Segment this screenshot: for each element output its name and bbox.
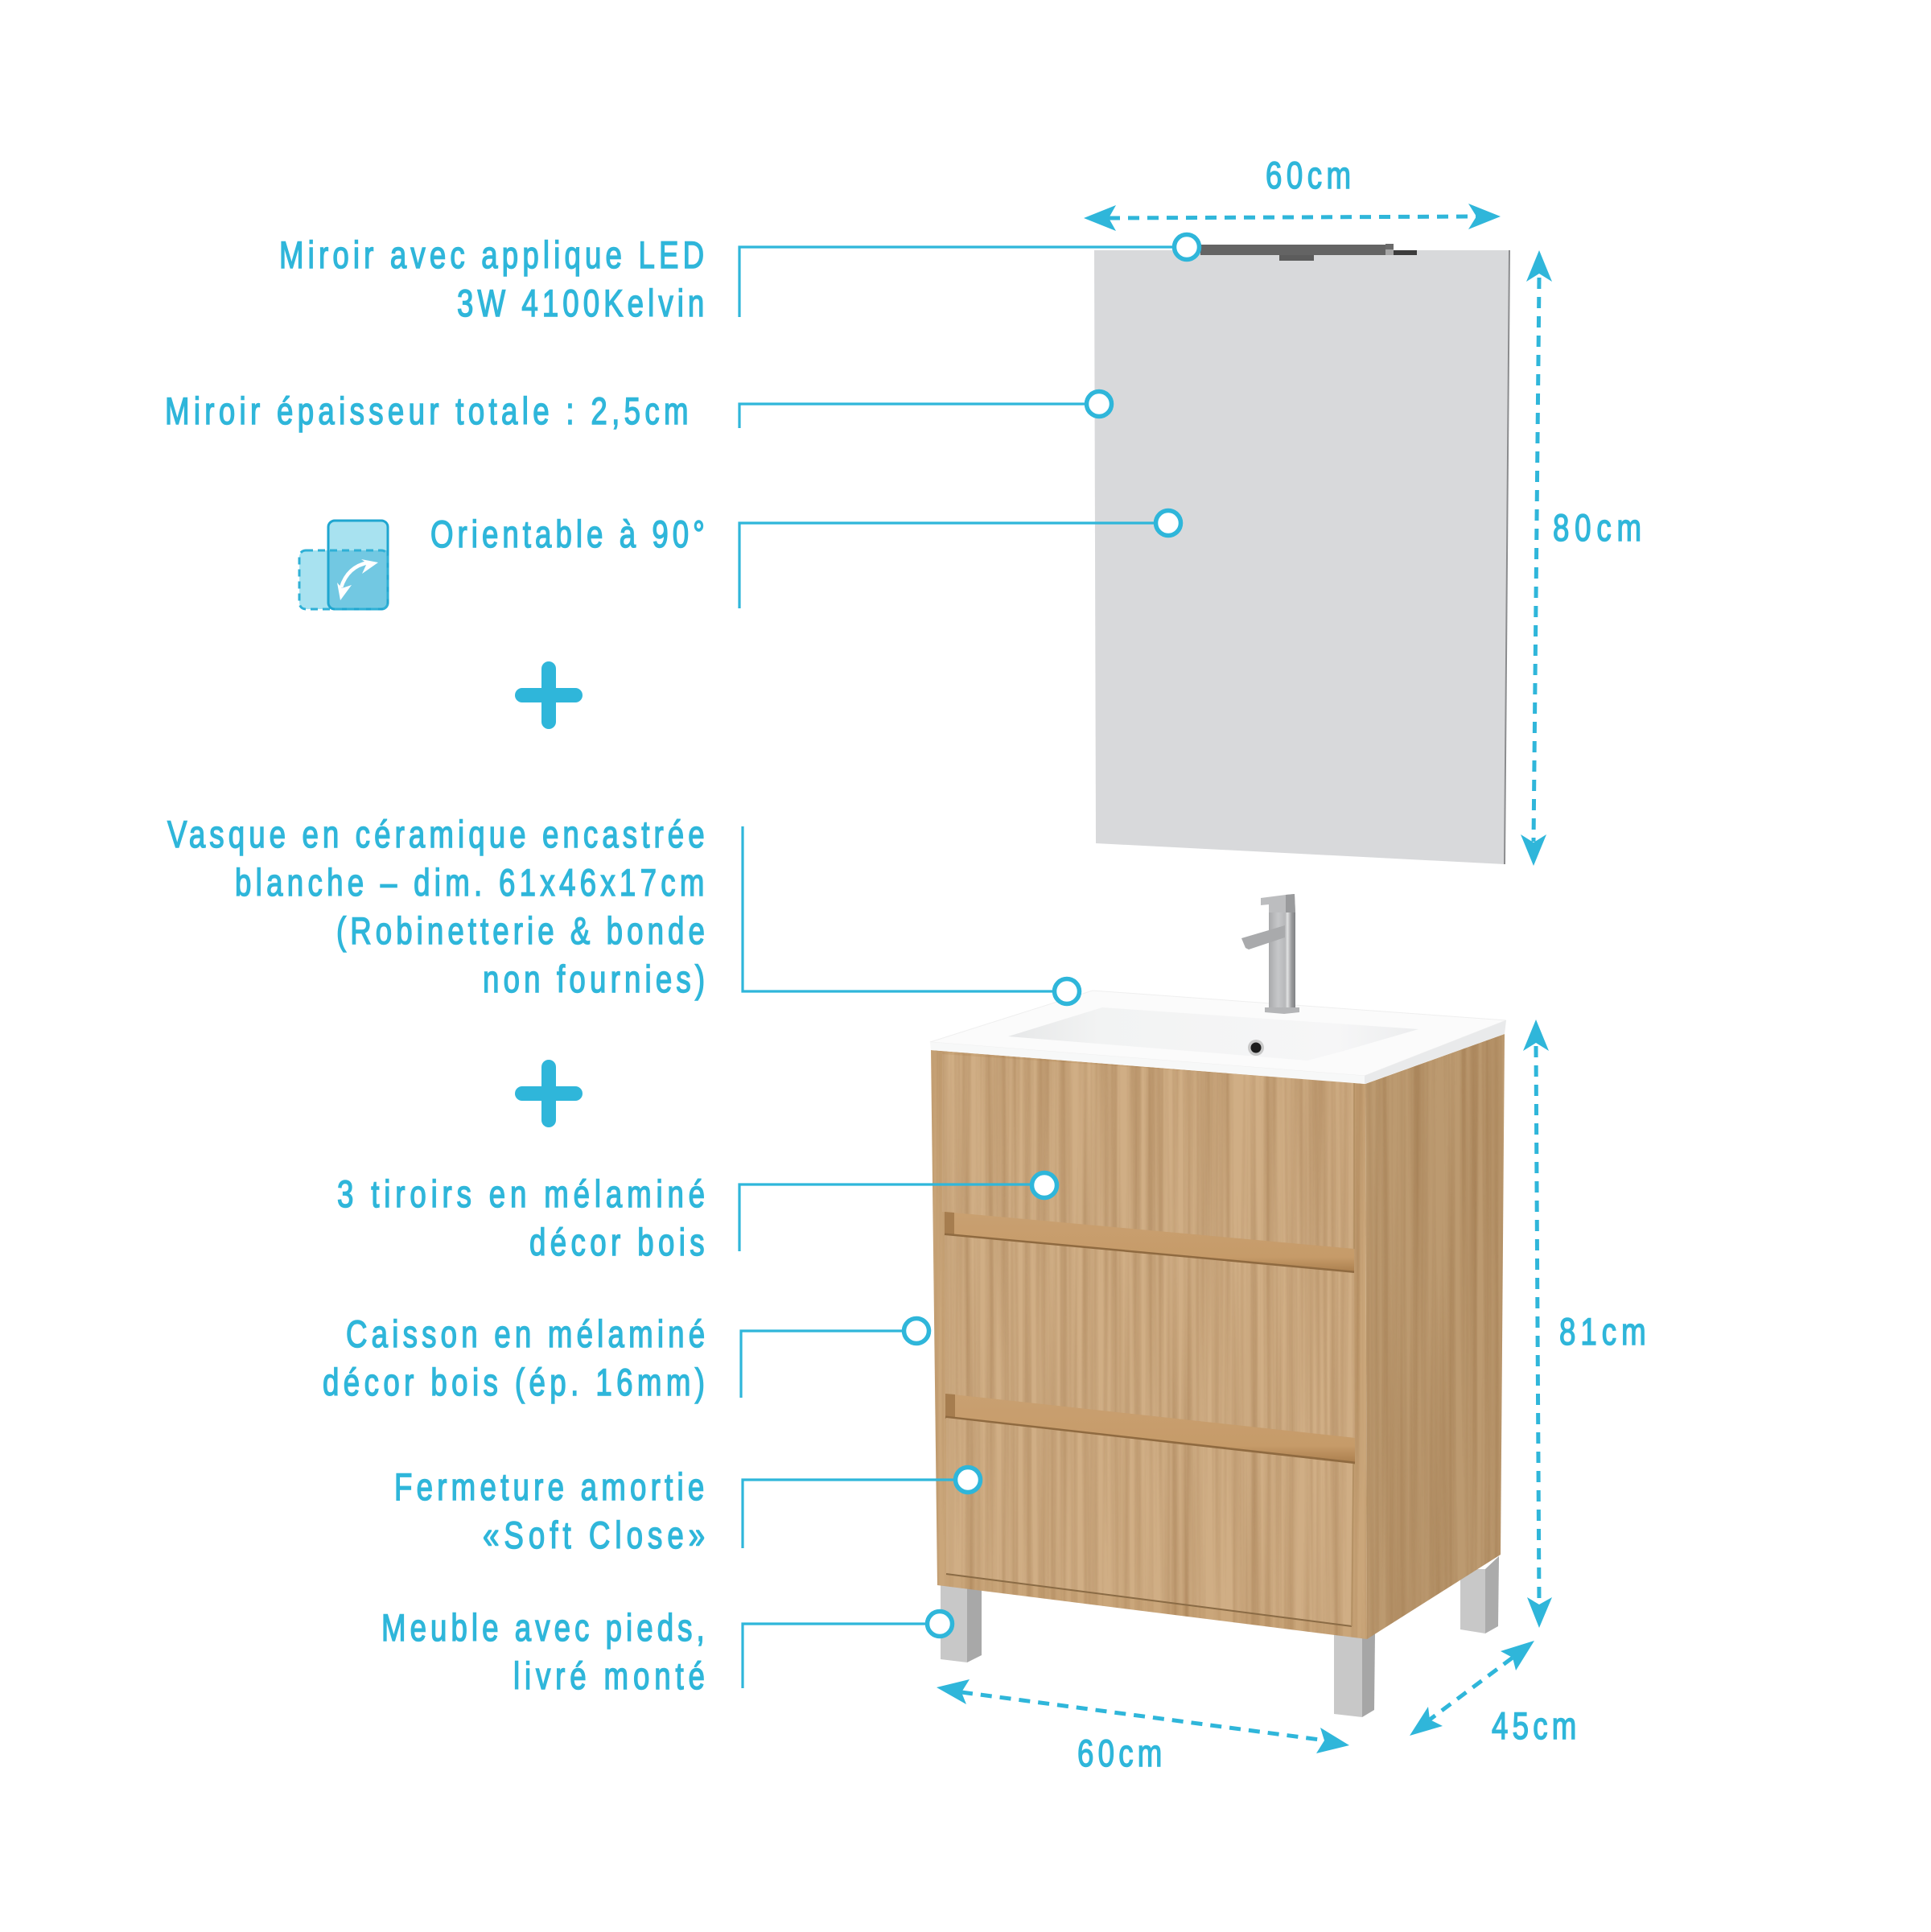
top drawer	[942, 1054, 1354, 1249]
text: basin: Vasque en céramique encastrée	[167, 814, 705, 855]
dimension: cabinet width	[937, 1679, 1349, 1774]
text: basin: non fournies)	[483, 958, 705, 1000]
cabinet frame	[931, 1050, 1367, 1639]
text: basin	[167, 814, 705, 1000]
bottom drawer	[946, 1418, 1353, 1626]
left leg	[941, 1581, 982, 1662]
basin bowl	[1008, 1007, 1418, 1061]
marker: case	[904, 1318, 928, 1344]
marker: feet	[927, 1611, 953, 1637]
middle drawer	[945, 1235, 1355, 1438]
text: mirror thickness: Miroir épaisseur totale : 2,5cm	[165, 390, 689, 432]
top handle recess	[945, 1212, 1354, 1272]
text: drawers: 3 tiroirs en mélaminé	[337, 1173, 705, 1215]
leader: orientable	[739, 523, 1167, 608]
leader: basin	[743, 826, 1067, 991]
marker: LED mirror	[1175, 235, 1199, 259]
vanity unit	[930, 894, 1506, 1717]
marker: soft close	[956, 1468, 980, 1492]
text: LED mirror	[279, 234, 704, 324]
text: LED mirror: Miroir avec applique LED	[279, 234, 704, 276]
mirror panel	[1094, 250, 1509, 864]
plus sign 2	[515, 1060, 583, 1127]
cabinet side	[1365, 1034, 1505, 1639]
marker: basin	[1054, 978, 1080, 1004]
ceramic basin	[930, 991, 1506, 1084]
text: basin: (Robinetterie & bonde	[336, 910, 705, 952]
drain	[1248, 1040, 1264, 1056]
tap	[1241, 894, 1299, 1014]
leader: drawers	[739, 1184, 1044, 1251]
text: drawers: décor bois	[529, 1221, 705, 1263]
text: feet: livré monté	[513, 1655, 705, 1697]
back right leg	[1460, 1556, 1499, 1633]
marker: drawers	[1031, 1173, 1057, 1197]
text: case	[323, 1313, 705, 1403]
leader: feet	[743, 1624, 940, 1688]
label: 81cm: 81cm	[1559, 1311, 1646, 1353]
text: soft close	[394, 1466, 705, 1556]
text: case: Caisson en mélaminé	[346, 1313, 705, 1355]
leader: LED mirror	[739, 247, 1187, 317]
icon: rotation 90 degrees	[299, 521, 388, 609]
dimension: mirror height	[1521, 250, 1641, 866]
mirror right edge	[1505, 250, 1509, 864]
dimension: cabinet height	[1523, 1020, 1646, 1628]
text: LED mirror: 3W 4100Kelvin	[457, 282, 704, 324]
label: 60cm: 60cm	[1266, 154, 1351, 196]
LED light bar	[1200, 244, 1417, 261]
marker: orientable	[1155, 510, 1181, 536]
label: 80cm: 80cm	[1553, 507, 1641, 549]
text: soft close: «Soft Close»	[483, 1514, 705, 1556]
leader: case	[741, 1331, 916, 1398]
text: drawers	[337, 1173, 705, 1263]
marker: mirror thickness	[1086, 391, 1112, 417]
basin top	[930, 991, 1506, 1076]
lower handle recess	[945, 1394, 1355, 1463]
dimension: cabinet depth	[1410, 1641, 1576, 1747]
text: orientable: Orientable à 90°	[430, 513, 705, 555]
text: feet	[381, 1607, 705, 1697]
plus sign 1	[515, 661, 583, 729]
leader: mirror thickness	[739, 404, 1098, 428]
text: feet: Meuble avec pieds,	[381, 1607, 705, 1649]
mirror with LED light	[1094, 244, 1509, 864]
basin side rim	[1365, 1020, 1506, 1084]
basin front rim	[930, 1042, 1365, 1084]
label: 45cm: 45cm	[1492, 1705, 1576, 1747]
text: basin: blanche – dim. 61x46x17cm	[235, 862, 704, 904]
dimension: mirror width	[1084, 154, 1501, 231]
text: case: décor bois (ép. 16mm)	[323, 1361, 705, 1403]
front right leg	[1334, 1632, 1375, 1717]
label: 60cm: 60cm	[1077, 1732, 1162, 1774]
text: soft close: Fermeture amortie	[394, 1466, 704, 1508]
leader: soft close	[743, 1480, 968, 1548]
